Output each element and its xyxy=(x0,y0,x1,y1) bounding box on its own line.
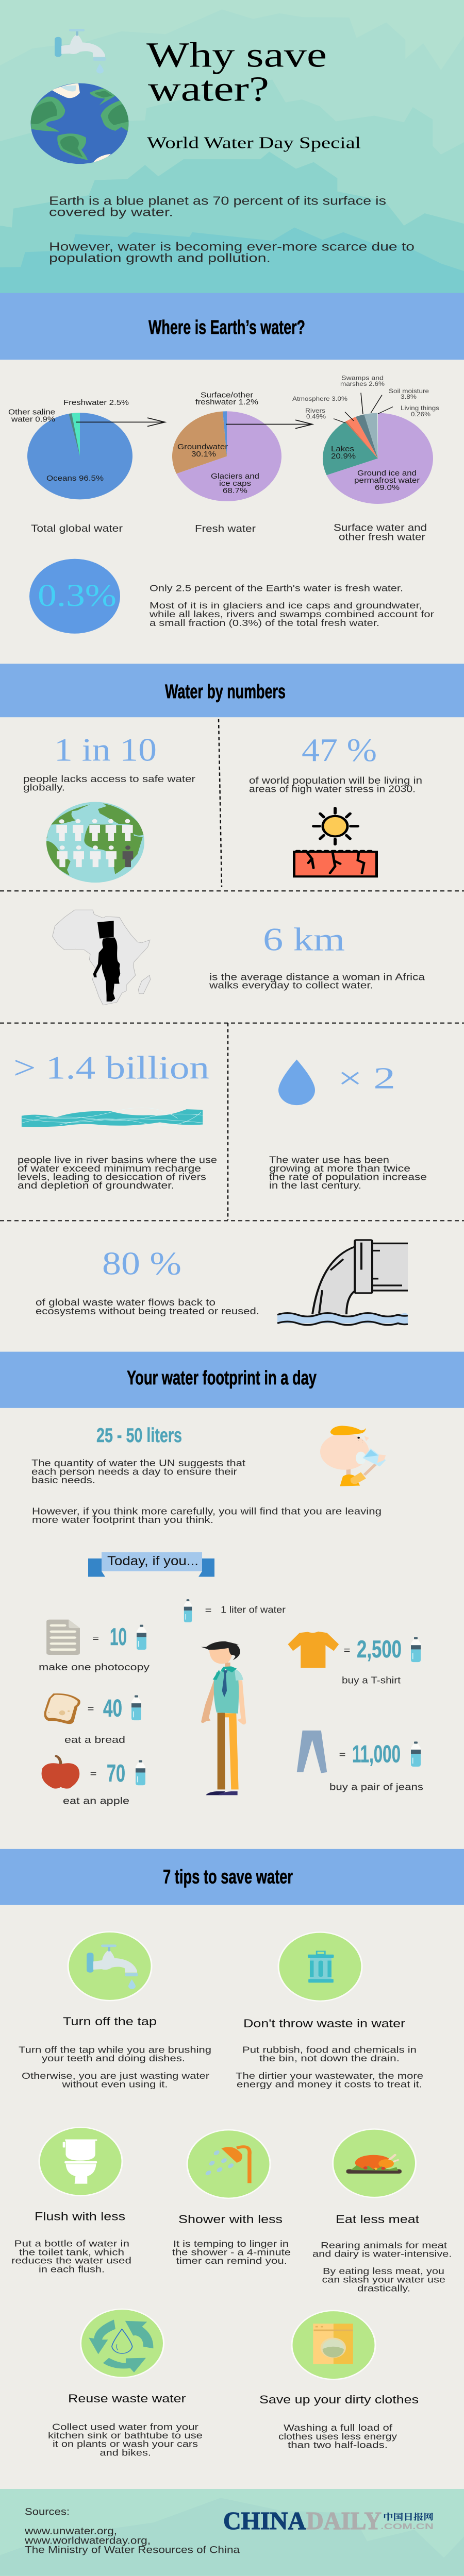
icon: shower xyxy=(204,2147,250,2183)
logo: China Daily xyxy=(223,2507,434,2535)
tip: don't throw waste in water: Put rubbish, food and chemicals in xyxy=(242,2045,417,2055)
stat: water use times two xyxy=(269,1060,427,1191)
stat: 6 km xyxy=(53,910,425,1005)
pie chart: surface and other fresh water: marshes 2.6% xyxy=(340,380,385,387)
stat: 47 percent: areas of high water stress in 2030. xyxy=(249,784,416,794)
icon: woman carrying water on map of Africa xyxy=(53,910,151,1005)
heading band: 7 tips xyxy=(0,1849,464,1905)
logo: China Daily: .COM.CN xyxy=(380,2522,434,2531)
tip: flush with less xyxy=(11,2127,131,2275)
heading band: where is earth's water: Where is Earth’s water? xyxy=(148,316,305,338)
stat: over 1.4 billion xyxy=(13,1050,217,1191)
stat: 47 percent: 47 % xyxy=(302,732,377,768)
tip: eat less meat: By eating less meat, you xyxy=(323,2267,444,2276)
sources text xyxy=(24,2505,240,2555)
text: 25 to 50 liters: However, if you think more carefully, you will find that you are leaving xyxy=(32,1506,382,1517)
icon: earth globe xyxy=(29,83,130,165)
legend: one bottle equals one liter xyxy=(184,1599,286,1622)
pie captions: Surface water and xyxy=(334,521,427,533)
stat: 6 km: 6 km xyxy=(263,922,345,958)
pie chart: total global water: water 0.9% xyxy=(11,415,55,423)
pie captions xyxy=(31,521,427,543)
icon: tap xyxy=(87,1944,138,1989)
intro text: Earth is a blue planet as 70 percent of its surface is xyxy=(49,195,386,208)
pie chart: total global water: Oceans 96.5% xyxy=(46,474,104,483)
item: jeans 11,000 liters: buy a pair of jeans xyxy=(329,1782,423,1792)
stat: 80 percent: ecosystems without being treated or reused. xyxy=(36,1307,259,1317)
tip: reuse waste water: Reuse waste water xyxy=(68,2393,186,2405)
tip: don't throw waste in water xyxy=(236,1932,423,2090)
item: photocopy 10 liters: 10 xyxy=(110,1624,127,1651)
tip: flush with less: Put a bottle of water in xyxy=(14,2239,129,2249)
pie chart: surface and other fresh water: Ground ice and xyxy=(357,469,417,478)
sources text: www.unwater.org, xyxy=(24,2525,117,2537)
icon: sun over cracked ground xyxy=(294,808,376,876)
intro text xyxy=(49,195,415,265)
icon: jeans xyxy=(297,1731,327,1773)
panel: footer xyxy=(0,2489,464,2575)
item: photocopy 10 liters: = xyxy=(92,1633,99,1643)
icon: water drop xyxy=(278,1060,315,1105)
pie chart: fresh water: 30.1% xyxy=(191,450,216,459)
item: bread 40 liters: = xyxy=(88,1704,94,1714)
tip: shower with less xyxy=(172,2130,291,2266)
tip: turn off the tap: Otherwise, you are just wasting water xyxy=(22,2071,210,2081)
tip: turn off the tap: without even using it. xyxy=(61,2080,168,2090)
item: t-shirt 2,500 liters: 2,500 xyxy=(357,1636,402,1663)
pie chart: surface and other fresh water xyxy=(292,375,439,504)
pie chart: surface and other fresh water: 0.26% xyxy=(411,411,430,417)
pie chart: surface and other fresh water: Rivers xyxy=(305,407,325,414)
pie chart: fresh water: freshwater 1.2% xyxy=(195,398,258,406)
item: photocopy 10 liters: make one photocopy xyxy=(39,1663,150,1672)
sources text: www.worldwaterday.org, xyxy=(24,2534,151,2546)
intro text: covered by water. xyxy=(49,206,173,219)
sources text: Sources: xyxy=(25,2505,70,2517)
tip: eat less meat: can slash your water use xyxy=(322,2275,445,2285)
tip: save up your dirty clothes: Washing a full load of xyxy=(284,2424,393,2433)
pie chart: fresh water: 68.7% xyxy=(223,486,247,495)
item: t-shirt 2,500 liters: = xyxy=(344,1646,350,1655)
fresh water explanation text: Most of it is in glaciers and ice caps and groundwater, xyxy=(150,601,422,611)
item: jeans 11,000 liters: = xyxy=(339,1750,345,1760)
fresh water explanation text: a small fraction (0.3%) of the total fresh water. xyxy=(150,618,379,628)
pie chart: fresh water: ice caps xyxy=(219,479,251,488)
tip: save up your dirty clothes xyxy=(259,2311,419,2450)
pie captions: Fresh water xyxy=(195,522,256,534)
text: 25 to 50 liters: basic needs. xyxy=(31,1476,95,1486)
fresh water explanation text: while all lakes, rivers and swamps combined account for xyxy=(149,609,434,620)
fresh water explanation text xyxy=(149,583,434,628)
stat: 6 km: is the average distance a woman in Africa xyxy=(209,972,425,982)
tip: reuse waste water: Collect used water from your xyxy=(52,2422,199,2432)
pie captions: Total global water xyxy=(31,522,123,534)
tip: save up your dirty clothes: clothes uses less energy xyxy=(278,2432,397,2442)
intro text: However, water is becoming ever-more scarce due to xyxy=(49,241,415,253)
arrow: fresh to surface xyxy=(226,420,312,429)
tip: turn off the tap: your teeth and doing dishes. xyxy=(42,2054,185,2063)
heading band: water by numbers xyxy=(0,664,464,717)
stat: water use times two: in the last century. xyxy=(269,1181,361,1191)
stat: water use times two: × 2 xyxy=(338,1061,395,1095)
item: t-shirt 2,500 liters: buy a T-shirt xyxy=(342,1675,401,1686)
tip: turn off the tap xyxy=(19,1932,211,2090)
pie chart: surface and other fresh water: Lakes xyxy=(331,445,354,453)
icon: washing machine xyxy=(313,2324,353,2364)
item: bread 40 liters: 40 xyxy=(103,1695,122,1722)
icon: dripping tap xyxy=(55,29,106,74)
icon: toilet xyxy=(63,2139,97,2184)
stat: over 1.4 billion: of water exceed minimum recharge xyxy=(18,1164,201,1174)
subtitle: World Water Day Special xyxy=(147,134,361,152)
item: apple 70 liters: = xyxy=(90,1769,96,1779)
text: 25 to 50 liters xyxy=(31,1425,382,1525)
fresh water explanation text: Only 2.5 percent of the Earth's water is fresh water. xyxy=(150,583,403,594)
stat: 1 in 10: people lacks access to safe water xyxy=(23,774,195,784)
icon: river xyxy=(22,1108,203,1127)
tip: flush with less: the toilet tank, which xyxy=(19,2248,124,2258)
tip: turn off the tap: Turn off the tap xyxy=(63,2015,157,2028)
arrow: global to fresh xyxy=(76,418,165,427)
tip: eat less meat xyxy=(312,2129,452,2294)
tip: don't throw waste in water: energy and money it costs to treat it. xyxy=(237,2080,422,2090)
legend: one bottle equals one liter: = xyxy=(205,1605,211,1616)
icon: boy drinking water xyxy=(320,1426,386,1486)
item: t-shirt 2,500 liters xyxy=(288,1632,421,1686)
sources text: The Ministry of Water Resources of China xyxy=(25,2544,240,2555)
pie captions: other fresh water xyxy=(339,531,425,543)
heading band: water footprint xyxy=(0,1352,464,1408)
icon: document xyxy=(46,1620,80,1655)
stat: 1 in 10 xyxy=(23,732,195,883)
tip: reuse waste water: it on plants or wash your cars xyxy=(53,2439,198,2449)
tip: reuse waste water xyxy=(48,2309,203,2458)
tip: shower with less: Shower with less xyxy=(178,2213,283,2226)
pie chart: surface and other fresh water: Atmosphere 3.0% xyxy=(292,395,347,402)
heading band: where is earth's water xyxy=(0,293,464,360)
heading band: water footprint: Your water footprint in a day xyxy=(127,1367,317,1388)
stat: water use times two: growing at more than twice xyxy=(269,1164,410,1174)
stat: 6 km: walks everyday to collect water. xyxy=(209,980,373,991)
icon: t-shirt xyxy=(288,1632,339,1668)
tip: save up your dirty clothes: than two half-loads. xyxy=(288,2441,388,2450)
icon: bin xyxy=(308,1951,334,1982)
title: Why save xyxy=(146,35,327,75)
callout: 0.3 percent xyxy=(29,559,120,634)
banner: today, if you: Today, if you... xyxy=(107,1554,198,1568)
tip: don't throw waste in water: Don't throw waste in water xyxy=(243,2018,405,2030)
tip: flush with less: reduces the water used xyxy=(11,2256,131,2266)
icon: apple xyxy=(42,1756,79,1789)
pie chart: total global water: Other saline xyxy=(8,408,55,416)
banner: today, if you xyxy=(88,1552,214,1577)
tip: flush with less: in each flush. xyxy=(39,2265,105,2275)
item: bread 40 liters: eat a bread xyxy=(64,1735,125,1745)
stat: over 1.4 billion: and depletion of groundwater. xyxy=(18,1181,174,1191)
intro text: population growth and pollution. xyxy=(49,252,271,265)
stat: water use times two: The water use has been xyxy=(269,1155,389,1165)
text: 25 to 50 liters: The quantity of water the UN suggests that xyxy=(31,1459,245,1469)
tip: don't throw waste in water: The dirtier your wastewater, the more xyxy=(236,2071,423,2081)
heading band: 7 tips: 7 tips to save water xyxy=(163,1866,293,1888)
tip: save up your dirty clothes: Save up your dirty clothes xyxy=(259,2394,419,2406)
stat: 80 percent xyxy=(36,1240,408,1325)
icon: waste water pipe xyxy=(277,1240,408,1325)
tip: eat less meat: Rearing animals for meat xyxy=(321,2241,448,2251)
icon: bread xyxy=(44,1693,80,1724)
tip: reuse waste water: kitchen sink or bathtube to use xyxy=(48,2431,203,2441)
stat: 1 in 10: globally. xyxy=(23,783,65,793)
icon: roast turkey xyxy=(346,2155,402,2174)
tip: shower with less: It is temping to linger in xyxy=(173,2240,289,2249)
logo: China Daily: DAILY xyxy=(306,2507,382,2535)
legend: one bottle equals one liter: 1 liter of water xyxy=(221,1605,286,1615)
item: jeans 11,000 liters: 11,000 xyxy=(352,1741,401,1768)
text: 25 to 50 liters: more water footprint than you think. xyxy=(32,1515,213,1525)
pie chart: surface and other fresh water: 69.0% xyxy=(375,484,400,492)
stat: 1 in 10: 1 in 10 xyxy=(54,732,157,768)
tip: shower with less: the shower - a 4-minute xyxy=(172,2248,291,2258)
tip: shower with less: timer can remind you. xyxy=(176,2257,287,2266)
stat: over 1.4 billion: > 1.4 billion xyxy=(13,1050,209,1086)
tip: eat less meat: Eat less meat xyxy=(336,2213,419,2226)
tip: eat less meat: drastically. xyxy=(357,2284,410,2294)
pie chart: surface and other fresh water: Swamps and xyxy=(341,375,384,381)
text: 25 to 50 liters: 25 - 50 liters xyxy=(96,1425,182,1447)
stat: over 1.4 billion: levels, leading to desiccation of rivers xyxy=(18,1172,206,1182)
pie chart: total global water xyxy=(8,398,132,499)
panel: header xyxy=(0,0,464,293)
figure: standing man xyxy=(201,1641,246,1795)
heading band: water by numbers: Water by numbers xyxy=(165,681,286,702)
pie chart: surface and other fresh water: permafrost water xyxy=(354,477,420,485)
stat: 47 percent xyxy=(249,732,422,876)
tip: flush with less: Flush with less xyxy=(35,2210,125,2223)
tip: don't throw waste in water: the bin, not down the drain. xyxy=(259,2054,400,2063)
title xyxy=(146,35,327,109)
stat: 80 percent: of global waste water flows back to xyxy=(36,1298,216,1308)
pie chart: surface and other fresh water: Living things xyxy=(401,404,439,412)
stat: 80 percent: 80 % xyxy=(102,1246,181,1282)
pie chart: surface and other fresh water: 0.49% xyxy=(306,413,326,420)
item: bread 40 liters xyxy=(44,1693,141,1745)
pie chart: surface and other fresh water: 3.8% xyxy=(401,393,417,400)
logo: China Daily: 中国日报网 xyxy=(383,2512,434,2522)
icon: recycling arrows around drop xyxy=(89,2319,153,2372)
text: 25 to 50 liters: each person needs a day to ensure their xyxy=(31,1467,237,1477)
stat: over 1.4 billion: people live in river basins where the use xyxy=(18,1155,217,1165)
logo: China Daily: CHINA xyxy=(223,2507,306,2535)
item: photocopy 10 liters xyxy=(39,1620,150,1672)
pie chart: fresh water: Surface/other xyxy=(201,391,254,399)
pie chart: fresh water: Groundwater xyxy=(177,443,228,451)
tip: turn off the tap: Turn off the tap while you are brushing xyxy=(19,2045,211,2055)
callout: 0.3 percent: 0.3% xyxy=(38,578,117,613)
item: jeans 11,000 liters xyxy=(297,1731,423,1792)
mountain background layers xyxy=(0,9,464,293)
tip: reuse waste water: and bikes. xyxy=(100,2448,151,2458)
pie chart: surface and other fresh water: 20.9% xyxy=(331,452,356,461)
pie chart: surface and other fresh water: Soil moisture xyxy=(389,387,429,395)
pie chart: fresh water xyxy=(172,391,281,501)
tip: eat less meat: and dairy is water-intensive. xyxy=(312,2249,452,2259)
stat: water use times two: the rate of population increase xyxy=(269,1172,427,1182)
icon: globe with ten people xyxy=(45,802,144,883)
item: apple 70 liters: 70 xyxy=(107,1760,125,1787)
pie chart: total global water: Freshwater 2.5% xyxy=(63,398,129,407)
item: apple 70 liters: eat an apple xyxy=(63,1796,129,1806)
title: water? xyxy=(148,69,269,109)
pie chart: fresh water: Glaciers and xyxy=(211,472,259,481)
item: apple 70 liters xyxy=(42,1756,145,1806)
stat: 47 percent: of world population will be living in xyxy=(249,775,422,786)
